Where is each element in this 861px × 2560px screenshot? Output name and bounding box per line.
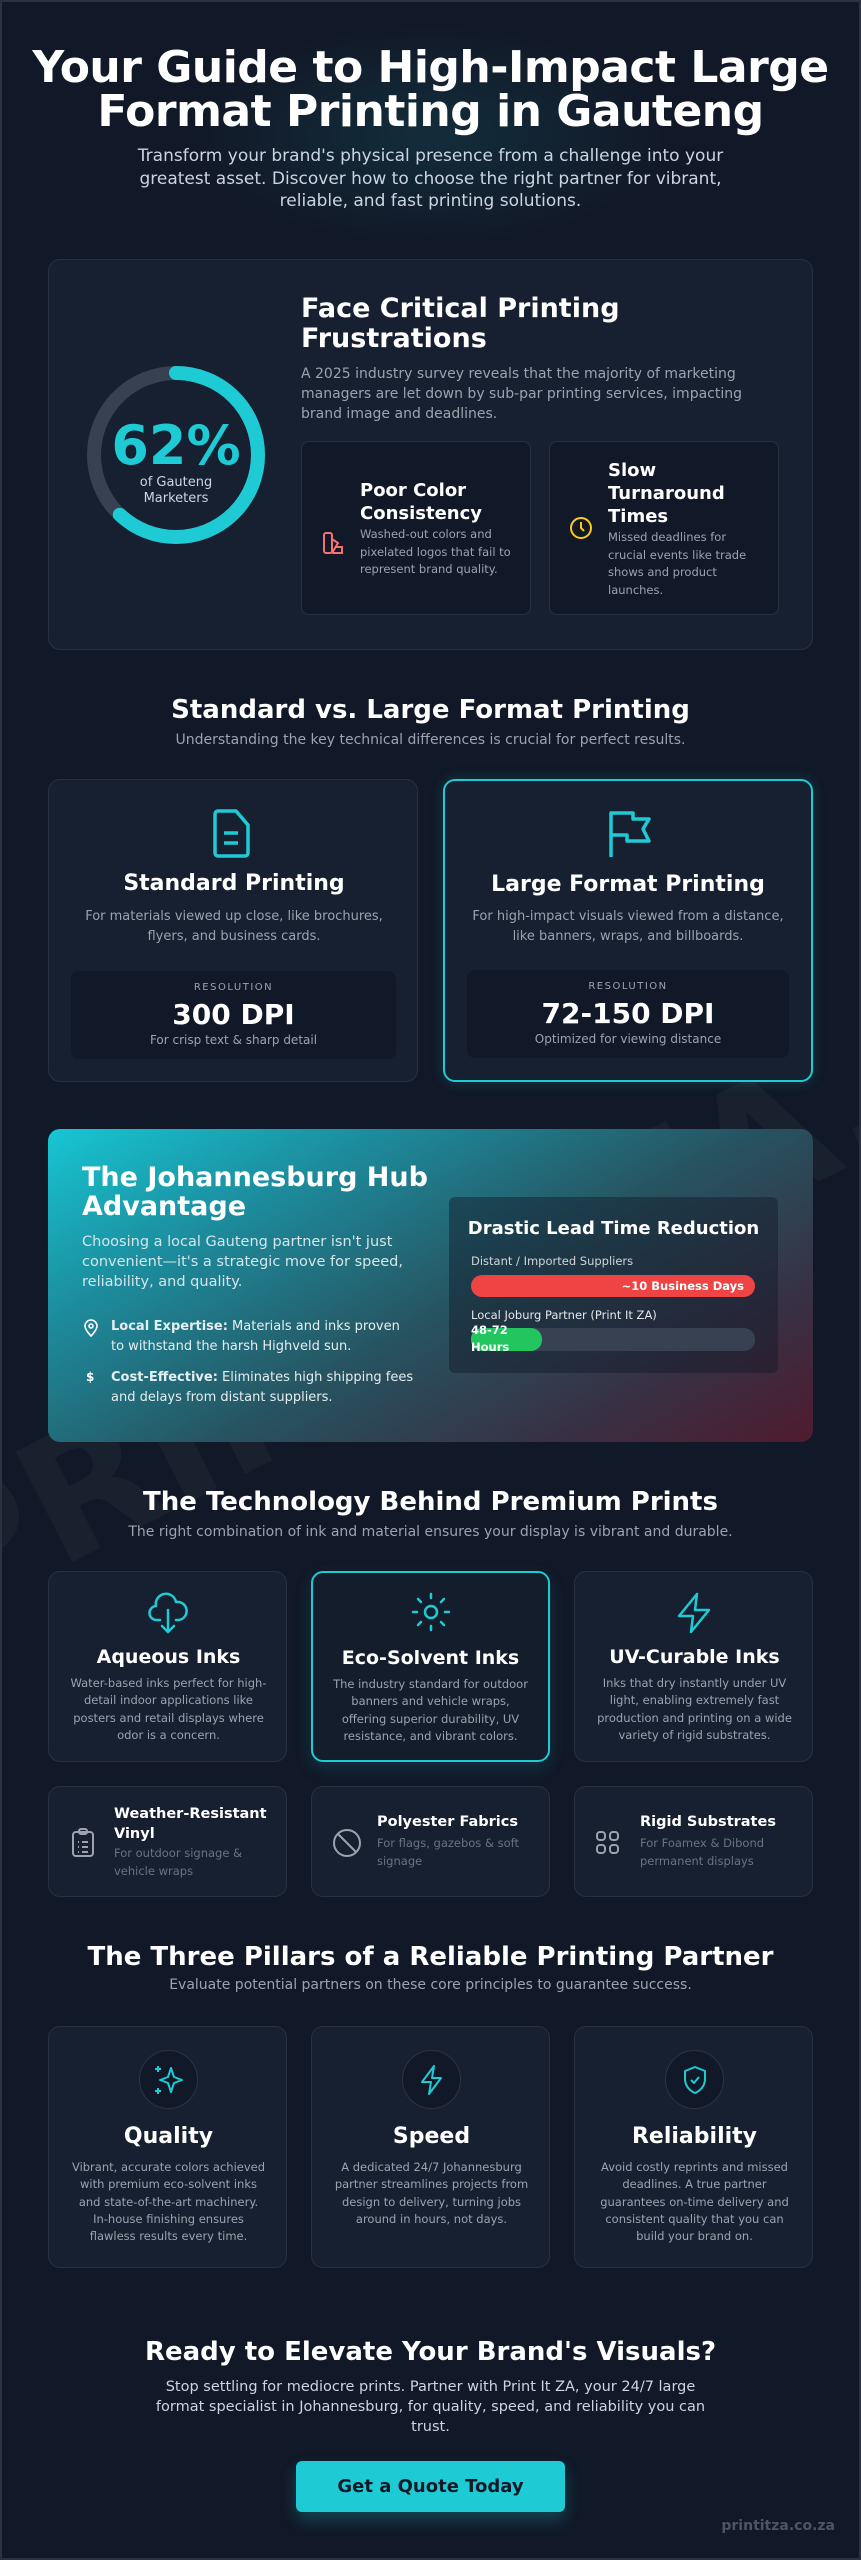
icon: document [213,809,250,858]
panel: standard printing: For materials viewed up close, like brochures, flyers, and business cards. [85,909,383,944]
card: quality: flawless results every time. [90,2229,247,2243]
bullet: cost-effective: $ [86,1370,94,1384]
icon: sparkles [139,2050,198,2109]
title: Format Printing in Gauteng [97,86,764,137]
card: slow turnaround: Slow Turnaround Times [608,460,725,527]
icon: sun [412,1592,450,1632]
button: get a quote [296,2461,565,2512]
resolution box: 300 DPI [172,998,295,1031]
card: vinyl: Weather-Resistant Vinyl [114,1806,267,1842]
card: eco-solvent inks: Eco-Solvent Inks [342,1647,519,1669]
chart: lead time: Drastic Lead Time Reduction [468,1218,759,1239]
card: rigid substrates [574,1786,813,1897]
subheading: Evaluate potential partners on these core principles to guarantee success. [169,1977,692,1993]
panel: standard printing: Standard Printing [123,871,345,896]
panel: frustrations [48,259,813,650]
card: aqueous inks [48,1571,287,1762]
icon: swatch [323,532,343,554]
bar: local [471,1328,755,1351]
donut chart: 62%: of Gauteng [140,475,212,490]
card: uv-curable inks [574,1571,813,1762]
icon: clock [570,517,592,539]
card: quality: In-house finishing ensures [93,2212,244,2226]
panel: large format printing: Large Format Printing [491,872,765,897]
resolution box: For crisp text & sharp detail [150,1033,317,1047]
footer url: printitza.co.za [721,2518,835,2534]
card: polyester: Polyester Fabrics [377,1814,518,1830]
card: vinyl [48,1786,287,1897]
card: poor color: Washed-out colors and pixelated logos that fail to represent brand quality. [360,527,511,576]
subtitle: Transform your brand's physical presence from a challenge into your greatest asset. Discover how to choose the right partner for vibrant, reliable, and fast printing solutions. [138,146,723,211]
card: rigid substrates: For Foamex & Dibond permanent displays [640,1836,764,1868]
card: quality [48,2026,287,2268]
card: polyester [311,1786,550,1897]
card: quality: Quality [124,2124,213,2149]
title [32,42,829,137]
resolution box: RESOLUTION [194,982,273,993]
icon: cloud download [148,1592,188,1634]
description: Choosing a local Gauteng partner isn't just convenient—it's a strategic move for speed, reliability, and quality. [82,1234,403,1290]
card: eco-solvent inks [311,1571,550,1762]
icon: ban [333,1829,361,1857]
resolution box [71,971,396,1059]
panel: johannesburg hub [48,1129,813,1442]
heading: standard vs large: Standard vs. Large Format Printing [171,695,690,725]
card: uv-curable inks: Inks that dry instantly under UV light, enabling extremely fast production and printing on a wide variety of rigid substrates. [597,1676,792,1742]
card: reliability [574,2026,813,2268]
chart: lead time [449,1197,778,1373]
icon: shield check [665,2050,724,2109]
panel: large format printing: For high-impact visuals viewed from a distance, like banners, wraps, and billboards. [472,909,784,944]
subheading: Understanding the key technical differences is crucial for perfect results. [175,732,686,748]
heading: pillars: The Three Pillars of a Reliable Printing Partner [88,1942,774,1972]
resolution box [467,970,789,1058]
icon: grid [596,1831,619,1854]
button: get a quote: Get a Quote Today [337,2476,524,2497]
chart: lead time: Distant / Imported Suppliers [471,1254,633,1268]
panel: standard printing [48,779,418,1082]
bullet: local expertise: Local Expertise: Materials and inks proven to withstand the harsh Highveld sun. [111,1319,400,1354]
card: rigid substrates: Rigid Substrates [640,1814,776,1830]
subheading: The right combination of ink and material ensures your display is vibrant and durable. [128,1524,733,1540]
description: A 2025 industry survey reveals that the majority of marketing managers are let down by sub-par printing services, impacting brand image and deadlines. [301,366,742,422]
icon: flag [609,811,651,857]
heading: technology: The Technology Behind Premium Prints [143,1487,718,1517]
card: speed: A dedicated 24/7 Johannesburg partner streamlines projects from design to delivery, turning jobs around in hours, not days. [335,2160,528,2226]
heading: Face Critical Printing Frustrations [301,293,620,354]
icon: clipboard [72,1828,94,1857]
card: quality: with premium eco-solvent inks [80,2177,257,2191]
card: uv-curable inks: UV-Curable Inks [609,1646,780,1668]
card: speed [311,2026,550,2268]
cta heading: Ready to Elevate Your Brand's Visuals? [145,2337,716,2367]
panel: large format printing [443,779,813,1082]
card: aqueous inks: Water-based inks perfect for high-detail indoor applications like posters and retail displays where odor is a concern. [70,1676,266,1742]
bar: distant: ~10 Business Days [622,1279,744,1293]
card: reliability: Avoid costly reprints and missed deadlines. A true partner guarantees on-time delivery and consistent quality that you can build your brand on. [600,2160,789,2243]
card: quality: and state-of-the-art machinery. [79,2195,258,2209]
donut chart: 62% [87,366,265,544]
card: reliability: Reliability [632,2124,757,2149]
heading: The Johannesburg Hub Advantage [82,1162,428,1222]
card: poor color: Poor Color Consistency [360,480,482,524]
resolution box: RESOLUTION [588,981,668,992]
icon: lightning [678,1592,710,1634]
resolution box: 72-150 DPI [542,997,714,1030]
bar: local: 48-72 Hours [471,1323,509,1354]
icon: lightning [402,2050,461,2109]
card: quality: Vibrant, accurate colors achieved [72,2160,265,2174]
donut chart: 62%: Marketers [144,491,208,506]
bar: distant [471,1275,755,1297]
bullet: cost-effective: Cost-Effective: Eliminates high shipping fees and delays from distant suppliers. [111,1370,413,1405]
card: polyester: For flags, gazebos & soft signage [377,1836,519,1868]
cta description: Stop settling for mediocre prints. Partner with Print It ZA, your 24/7 large format specialist in Johannesburg, for quality, speed, and reliability you can trust. [156,2379,705,2435]
title: Your Guide to High-Impact Large [32,42,829,93]
donut chart: 62%: 62% [111,414,241,477]
card: vinyl: For outdoor signage & vehicle wraps [114,1846,242,1878]
resolution box: Optimized for viewing distance [535,1032,721,1046]
card: slow turnaround [549,441,779,615]
card: slow turnaround: Missed deadlines for crucial events like trade shows and product launches. [608,530,746,596]
card: eco-solvent inks: The industry standard for outdoor banners and vehicle wraps, offering superior durability, UV resistance, and vibrant colors. [333,1677,528,1743]
card: speed: Speed [393,2124,470,2149]
card: aqueous inks: Aqueous Inks [97,1646,240,1668]
card: poor color [301,441,531,615]
chart: lead time: Local Joburg Partner (Print It ZA) [471,1308,657,1322]
